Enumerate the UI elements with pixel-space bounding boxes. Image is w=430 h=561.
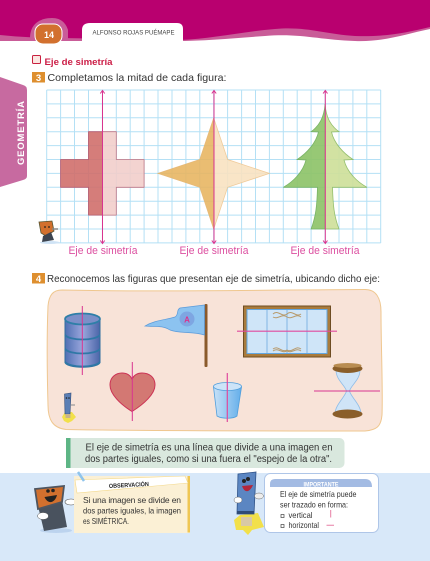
- callout: importante: vertical: [288, 510, 313, 520]
- callout: importante: IMPORTANTE: [304, 482, 339, 488]
- exercise 4 heading: Reconocemos las figuras que presentan eje de simetría, ubicando dicho eje:: [47, 273, 380, 285]
- page number badge: [30, 18, 68, 44]
- callout: importante: El eje de simetría puede: [280, 489, 357, 499]
- figure: cup: [214, 373, 242, 422]
- panel: figures: [47, 290, 382, 431]
- axis labels: Eje de simetría: [290, 245, 360, 257]
- figure: hourglass: [314, 363, 380, 418]
- mascot: computer: [35, 486, 77, 533]
- callout: observacion: es SIMÉTRICA.: [83, 516, 129, 526]
- page number badge: 14: [44, 30, 54, 40]
- callout: observacion: [74, 472, 190, 533]
- figure: flag: A: [184, 316, 190, 324]
- figure: window: [237, 306, 337, 357]
- figure: heart: [110, 362, 155, 421]
- grid: [47, 90, 381, 243]
- definition note: El eje de simetría es una línea que divide a una imagen en: [86, 442, 332, 454]
- section heading: Eje de simetría: [44, 57, 113, 68]
- mascot: small computer: [39, 221, 60, 244]
- definition note: [66, 438, 344, 468]
- axis labels: [68, 245, 360, 257]
- author tab: ALFONSO ROJAS PUÉMAPE: [92, 30, 174, 36]
- callout: importante: [264, 474, 378, 532]
- figure: star: [158, 118, 269, 229]
- exercise 3 heading: 3: [36, 73, 41, 84]
- side tab: geometria: GEOMETRÍA: [16, 101, 27, 165]
- author tab: [82, 23, 183, 41]
- figure: barrel: [65, 306, 100, 375]
- header band: [0, 0, 430, 41]
- figure: cross: [61, 132, 144, 215]
- callout: observacion: dos partes iguales, la imagen: [83, 506, 181, 516]
- bottom band: [0, 473, 430, 561]
- mascot: usb: [234, 472, 264, 535]
- callout: importante: ser trazado en forma:: [280, 500, 348, 510]
- exercise 3 heading: Completamos la mitad de cada figura:: [48, 72, 226, 84]
- symmetry axis arrows: [100, 90, 328, 244]
- side tab: geometria: [0, 77, 27, 187]
- axis labels: Eje de simetría: [68, 245, 138, 257]
- callout: observacion: Si una imagen se divide en: [83, 495, 181, 505]
- exercise 4 heading: 4: [36, 274, 42, 285]
- figure: tree: [283, 104, 367, 229]
- figure: flag: [145, 304, 208, 367]
- callout: observacion: OBSERVACIÓN: [109, 480, 149, 490]
- mascot: small usb: [62, 393, 76, 423]
- definition note: dos partes iguales, como si una fuera el "espejo de la otra".: [85, 454, 332, 465]
- axis labels: Eje de simetría: [180, 245, 249, 257]
- callout: importante: horizontal: [288, 520, 319, 530]
